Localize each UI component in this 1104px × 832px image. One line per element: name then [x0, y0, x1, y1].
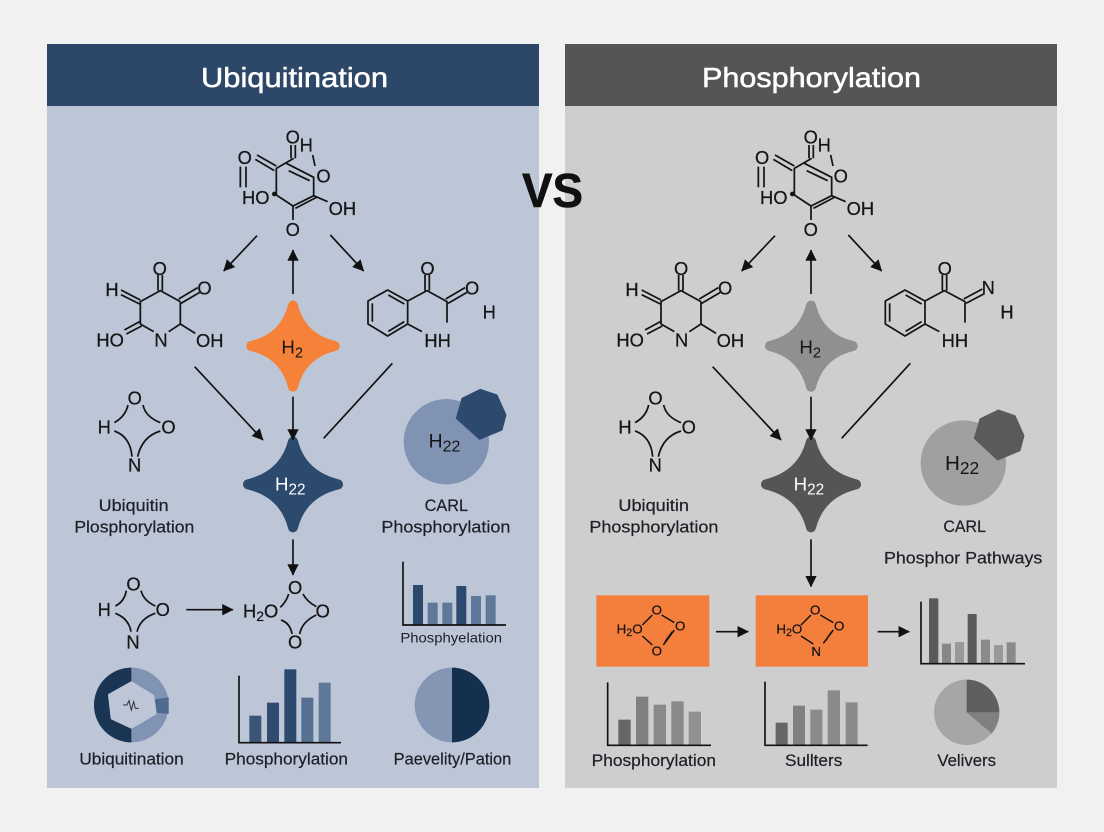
bar chart: phosphyelation: Phosphyelation	[400, 630, 502, 646]
molecule: left structure: H	[625, 279, 639, 300]
orange box: H2O ring: O	[652, 643, 662, 658]
label: CARL phosphorylation: Phosphorylation	[381, 518, 510, 537]
molecule: top structure: OH	[329, 198, 356, 219]
molecule: top structure: O	[755, 147, 769, 168]
arrow: up to top structure	[808, 250, 813, 294]
arrow: left structure to centre	[195, 367, 263, 440]
molecule: H O N ring: O	[126, 574, 141, 595]
arrow: ring to H2O ring	[186, 607, 233, 612]
molecule: H2O ring: O	[264, 601, 278, 622]
orange box: H2O ring: O	[652, 602, 662, 617]
molecule: left structure: O	[718, 277, 732, 298]
molecule: right structure: O	[420, 258, 435, 279]
orange box: H2O N ring: 2	[786, 627, 792, 639]
label: velivers: Velivers	[937, 751, 996, 770]
heading bar: phosphorylation: Phosphorylation	[702, 62, 921, 93]
bar chart: phosphyelation	[400, 562, 506, 646]
heading bar: phosphorylation	[565, 44, 1057, 106]
arrow: to left structure	[742, 236, 775, 271]
molecule: H2O ring	[243, 577, 330, 652]
molecule: right structure	[885, 258, 1014, 351]
molecule: ring with H O N	[98, 387, 176, 476]
molecule: ring with H O N: H	[618, 416, 632, 437]
connector: right structure to centre	[324, 363, 392, 438]
molecule: ring with H O N: N	[649, 455, 662, 476]
lower section	[74, 496, 511, 768]
molecule: H2O ring: O	[288, 577, 302, 598]
orange box: H2O N ring: H	[776, 621, 786, 636]
molecule: ring with H O N: N	[128, 455, 141, 476]
arrow: left structure to centre	[713, 367, 781, 440]
molecule: ring with H O N: O	[682, 416, 696, 437]
molecule: left structure	[96, 258, 223, 351]
icon: orange H2 star	[251, 306, 335, 387]
icon: dark H22 star: H	[794, 474, 807, 495]
panel: phosphorylation	[565, 44, 1057, 788]
arrow: to left structure	[224, 236, 257, 271]
molecule: ring with H O N: O	[648, 387, 663, 408]
molecule: right structure: HH	[424, 330, 451, 351]
label: ubiquitin plosphorylation: Plosphorylation	[74, 518, 194, 537]
label: ubiquitin plosphorylation	[74, 496, 194, 537]
pie chart: paevelity	[415, 668, 489, 742]
label: paevelity/pation: Paevelity/Pation	[394, 749, 511, 768]
label: CARL phosphor pathways: Phosphor Pathways	[884, 549, 1042, 568]
molecule: top structure: O	[238, 147, 252, 168]
VS badge: VS	[522, 165, 583, 218]
orange box: H2O ring: O	[675, 619, 685, 634]
molecule: left structure: N	[675, 330, 688, 351]
icon: circle H22	[404, 389, 506, 484]
icon: circle H22: H	[945, 452, 960, 475]
molecule: H2O ring: H	[243, 601, 256, 622]
arrow: to right structure	[330, 235, 364, 271]
molecule: left structure: OH	[717, 330, 744, 351]
molecule: left structure: H	[105, 279, 119, 300]
molecule: left structure: HO	[616, 329, 644, 350]
molecule: right structure	[368, 258, 496, 351]
label: phosphorylation: Phosphorylation	[592, 751, 716, 770]
molecule: top structure: O	[804, 219, 818, 240]
molecule: top structure: O	[316, 165, 331, 186]
icon: grey H2 star	[770, 306, 853, 387]
bar chart: phosphorylation	[239, 669, 341, 743]
molecule: left structure: HO	[96, 329, 124, 350]
orange box: H2O N ring: O	[792, 621, 802, 636]
orange box: H2O ring: O	[632, 621, 643, 636]
arrow: to right structure	[848, 235, 882, 271]
label: sullters: Sullters	[785, 751, 842, 770]
arrow: star to ring	[290, 539, 295, 575]
molecule: top structure: H	[300, 134, 313, 155]
label: ubiquitin phosphorylation: Phosphorylation	[589, 518, 718, 537]
lower section	[589, 496, 1042, 770]
label: CARL phosphorylation: CARL	[425, 496, 468, 515]
label: CARL phosphor pathways: CARL	[943, 517, 986, 536]
molecule: left structure: OH	[196, 330, 223, 351]
molecule: H2O ring: O	[288, 631, 302, 652]
molecule: H O N ring: N	[126, 632, 140, 653]
pathway diagram, upper section	[96, 126, 506, 527]
arrow: orange star to centre	[290, 397, 295, 440]
arrow: grey star to centre	[808, 397, 813, 440]
icon: grey H2 star: H	[799, 336, 813, 357]
arrow: between boxes	[716, 629, 748, 634]
molecule: H O N ring: O	[156, 599, 170, 620]
molecule: ring with H O N: O	[128, 387, 142, 408]
orange box: H2O N ring: O	[810, 602, 820, 617]
label: ubiquitin plosphorylation: Ubiquitin	[99, 496, 169, 515]
molecule: top structure: O	[286, 126, 300, 147]
molecule: ring with H O N: O	[161, 416, 176, 437]
icon: orange H2 star: 2	[295, 345, 303, 361]
orange box: H2O ring	[596, 595, 709, 667]
icon: dark H22 star	[248, 442, 338, 527]
orange box: H2O N ring: N	[811, 644, 821, 659]
molecule: right structure: HH	[942, 330, 968, 351]
molecule: H2O ring: O	[316, 600, 330, 621]
molecule: top structure: OH	[847, 198, 874, 219]
molecule: left structure: O	[153, 258, 167, 279]
icon: dark H22 star	[766, 442, 856, 527]
donut chart: ubiquitination	[94, 668, 169, 742]
molecule: left structure	[616, 258, 744, 351]
molecule: top structure: HO	[760, 187, 787, 208]
label: ubiquitin phosphorylation	[589, 496, 718, 537]
molecule: top structure: H	[818, 134, 831, 155]
molecule: top structure: HO	[242, 187, 269, 208]
pathway diagram, upper section	[616, 126, 1024, 527]
icon: circle H22: H	[429, 431, 443, 452]
molecule: right structure: H	[1000, 302, 1014, 323]
icon: circle H22	[921, 410, 1024, 506]
bar chart: sullters	[765, 682, 868, 745]
molecule: left structure: O	[197, 277, 212, 298]
molecule: right structure: N	[982, 277, 995, 298]
heading bar: ubiquitination: Ubiquitination	[201, 62, 388, 93]
molecule: ring with H O N	[618, 387, 696, 476]
label: CARL phosphorylation	[381, 496, 510, 537]
molecule: right structure: O	[465, 277, 479, 298]
icon: dark H22 star: 22	[288, 482, 306, 499]
molecule: top structure: O	[834, 165, 848, 186]
bar chart: phosphorylation	[608, 682, 711, 745]
arrow: star to orange box	[808, 539, 813, 587]
icon: orange H2 star: H	[281, 336, 295, 357]
molecule: H2O ring: 2	[256, 608, 264, 624]
molecule: top structure: O	[286, 219, 300, 240]
label: ubiquitin phosphorylation: Ubiquitin	[618, 496, 689, 515]
molecule: left structure: O	[674, 258, 688, 279]
molecule: top structure	[238, 126, 356, 240]
icon: dark H22 star: H	[275, 474, 288, 495]
orange box: H2O ring: H	[617, 621, 626, 636]
orange box: H2O N ring	[756, 595, 868, 667]
bar chart: upper right	[921, 598, 1025, 664]
label: ubiquitination: Ubiquitination	[79, 749, 184, 768]
label: phosphorylation: Phosphorylation	[225, 749, 348, 768]
molecule: right structure: O	[938, 258, 952, 279]
label: CARL phosphor pathways	[884, 517, 1042, 568]
icon: circle H22: 22	[443, 438, 461, 455]
orange box: H2O N ring: O	[834, 619, 844, 634]
molecule: top structure	[755, 126, 874, 240]
orange box: H2O ring: 2	[626, 627, 632, 639]
heading bar: ubiquitination	[47, 44, 539, 106]
molecule: ring with H O N: H	[98, 416, 111, 437]
icon: dark H22 star: 22	[807, 482, 824, 499]
pie chart: velivers	[934, 680, 999, 745]
molecule: right structure: H	[483, 302, 496, 323]
molecule: H O N ring: H	[98, 599, 111, 620]
molecule: H O N ring	[98, 574, 170, 653]
arrow: box to chart	[878, 629, 909, 634]
arrow: up to top structure	[290, 250, 295, 294]
panel: ubiquitination	[47, 44, 539, 788]
icon: grey H2 star: 2	[813, 345, 821, 361]
molecule: top structure: O	[804, 126, 818, 147]
molecule: left structure: N	[154, 330, 168, 351]
connector: right structure to centre	[842, 363, 910, 438]
icon: circle H22: 22	[960, 458, 979, 478]
